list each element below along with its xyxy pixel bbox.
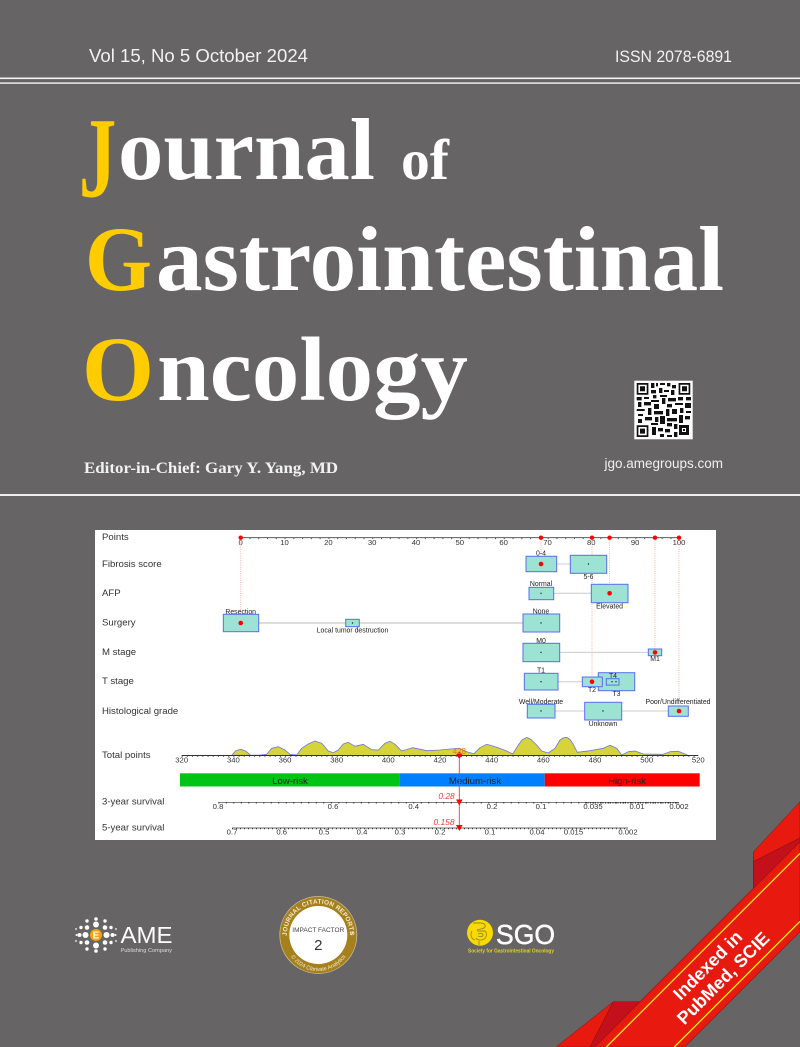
row: surgery: Resection <box>225 609 256 616</box>
chart: total points density: 440 <box>485 756 498 764</box>
5-year survival axis: 0.2 <box>435 828 445 836</box>
ribbon lower fold <box>556 1002 640 1047</box>
chart: total points density: 360 <box>279 756 291 764</box>
row: histological grade: Unknown <box>589 721 618 728</box>
row: T stage: T1 <box>537 668 545 674</box>
3-year survival axis <box>213 802 689 811</box>
axis score markers <box>238 536 681 540</box>
row labels: Histological grade <box>102 706 178 717</box>
journal title <box>79 95 724 420</box>
row labels: Total points <box>102 750 151 761</box>
row: AFP: Elevated <box>596 604 623 610</box>
icon: QR code <box>634 381 693 439</box>
3-year survival axis: 0.8 <box>213 802 223 811</box>
row labels: Surgery <box>102 618 136 628</box>
title line: Oncology: O <box>82 318 154 420</box>
points axis: 30 <box>368 538 376 547</box>
title line: Journal of: ournal <box>118 102 375 199</box>
badge: impact factor: IMPACT FACTOR <box>292 927 345 934</box>
5-year survival axis: 0.7 <box>227 828 237 836</box>
prediction marker <box>434 747 467 831</box>
3-year survival axis: 0.1 <box>536 802 546 811</box>
editor line: Editor-in-Chief: Gary Y. Yang, MD <box>84 460 338 477</box>
chart: total points density: 420 <box>434 756 446 764</box>
5-year survival axis: 0.015 <box>564 828 583 836</box>
ribbon band <box>595 842 800 1047</box>
row: AFP <box>529 581 628 610</box>
icon: AME dots <box>75 917 117 953</box>
row labels: AFP <box>102 588 121 599</box>
chart: total points density: 340 <box>227 756 240 764</box>
5-year survival axis: 0.5 <box>319 828 329 836</box>
ISSN: ISSN 2078-6891 <box>615 48 732 66</box>
title line: Journal of: of <box>401 129 450 192</box>
5-year survival axis: 0.3 <box>395 828 405 836</box>
chart: total points density: 520 <box>692 756 705 764</box>
title line: Gastrointestinal: astrointestinal <box>156 208 724 310</box>
points axis: 0 <box>239 538 243 547</box>
3-year survival axis: 0.2 <box>487 802 497 811</box>
row: histological grade: Well/Moderate <box>519 699 563 706</box>
row: histological grade: Poor/Undifferentiated <box>646 699 711 706</box>
prediction marker: 428 <box>453 747 467 756</box>
points axis: 60 <box>499 538 508 547</box>
points axis <box>239 538 685 547</box>
row: fibrosis score: 5-6 <box>584 574 594 581</box>
chart: total points density: 500 <box>640 756 653 764</box>
row: fibrosis score: 0-4 <box>536 550 546 558</box>
5-year survival axis <box>227 828 638 836</box>
row labels: 5-year survival <box>102 822 164 834</box>
logo: AME: E <box>93 930 100 942</box>
badge: impact factor: © 2024 Clarivate Analytics <box>292 955 346 971</box>
row labels: 3-year survival <box>102 796 164 808</box>
points axis: 40 <box>412 538 420 547</box>
logo: SGO: SGO <box>496 919 555 950</box>
chart: total points density: 460 <box>537 756 550 764</box>
risk bar: Medium-risk <box>449 776 501 787</box>
logo: SGO: Society for Gastrointestinal Oncology <box>468 948 554 954</box>
title line: Gastrointestinal: G <box>85 208 152 310</box>
points axis: 50 <box>456 538 464 547</box>
row labels: Fibrosis score <box>102 559 162 570</box>
chart: total points density: 480 <box>589 756 601 764</box>
risk bar <box>180 773 700 787</box>
logo: AME: Publishing Company <box>120 948 172 954</box>
5-year survival axis: 0.002 <box>618 828 638 836</box>
points axis: 90 <box>631 538 639 547</box>
icon: SGO digestive tract <box>467 920 493 946</box>
row labels: Points <box>102 532 129 543</box>
row labels <box>102 532 178 834</box>
risk bar: Low-risk <box>272 776 308 787</box>
chart: total points density: 320 <box>175 756 188 764</box>
3-year survival axis: 0.01 <box>630 802 644 811</box>
risk bar: High-risk <box>608 776 646 787</box>
points axis: 80 <box>587 538 596 547</box>
ribbon: indexed in PubMed, SCIE <box>556 802 800 1047</box>
logo: SGO <box>467 919 555 954</box>
score guide lines <box>241 538 679 711</box>
row: histological grade <box>519 699 711 728</box>
row: T stage: T2 <box>588 687 596 694</box>
row: AFP: Normal <box>530 581 553 588</box>
badge: impact factor: ® <box>348 931 355 936</box>
row: surgery <box>223 608 560 634</box>
row: M stage <box>523 638 662 663</box>
prediction marker: 0.158 <box>434 817 455 827</box>
chart: total points density: 400 <box>382 756 395 764</box>
5-year survival axis: 0.6 <box>276 828 287 836</box>
row: T stage <box>524 668 635 698</box>
points axis: 70 <box>543 538 552 547</box>
logo: AME: AME <box>120 922 172 948</box>
title line: Journal of <box>79 95 450 221</box>
points axis: 10 <box>280 538 289 547</box>
badge: impact factor: 2 <box>314 937 322 954</box>
ribbon upper fold <box>753 802 800 888</box>
row: surgery: Local tumor destruction <box>317 628 388 634</box>
3-year survival axis: 0.002 <box>669 802 689 811</box>
website: jgo.amegroups.com <box>604 456 723 471</box>
ribbon text: PubMed, SCIE <box>673 928 773 1028</box>
logo: AME <box>75 917 172 954</box>
chart: total points density: 380 <box>330 756 343 764</box>
3-year survival axis: 0.6 <box>328 802 338 811</box>
title line: Journal of: J <box>79 95 116 221</box>
3-year survival axis: 0.4 <box>408 802 420 811</box>
prediction marker: 0.28 <box>438 791 455 801</box>
5-year survival axis: 0.1 <box>485 828 495 836</box>
row: surgery: None <box>533 608 549 616</box>
chart: total points density <box>175 737 705 764</box>
badge: impact factor: JOURNAL CITATION REPORTS <box>282 899 354 936</box>
points axis: 100 <box>673 538 685 547</box>
row: fibrosis score <box>526 550 607 581</box>
row labels: M stage <box>102 647 136 658</box>
ribbon text: Indexed in <box>669 927 746 1004</box>
points axis: 20 <box>324 538 333 547</box>
badge: impact factor <box>279 896 358 974</box>
title line: Oncology: ncology <box>157 319 468 420</box>
5-year survival axis: 0.04 <box>530 828 545 836</box>
5-year survival axis: 0.4 <box>357 828 368 836</box>
row labels: T stage <box>102 676 134 687</box>
row: M stage: M0 <box>536 638 546 645</box>
3-year survival axis: 0.035 <box>583 802 603 811</box>
row: T stage: T3 <box>612 691 621 698</box>
panel: nomogram <box>95 530 716 840</box>
row: T stage: T4 <box>609 673 617 680</box>
row: M stage: M1 <box>650 656 660 663</box>
issue line: Vol 15, No 5 October 2024 <box>89 46 308 66</box>
